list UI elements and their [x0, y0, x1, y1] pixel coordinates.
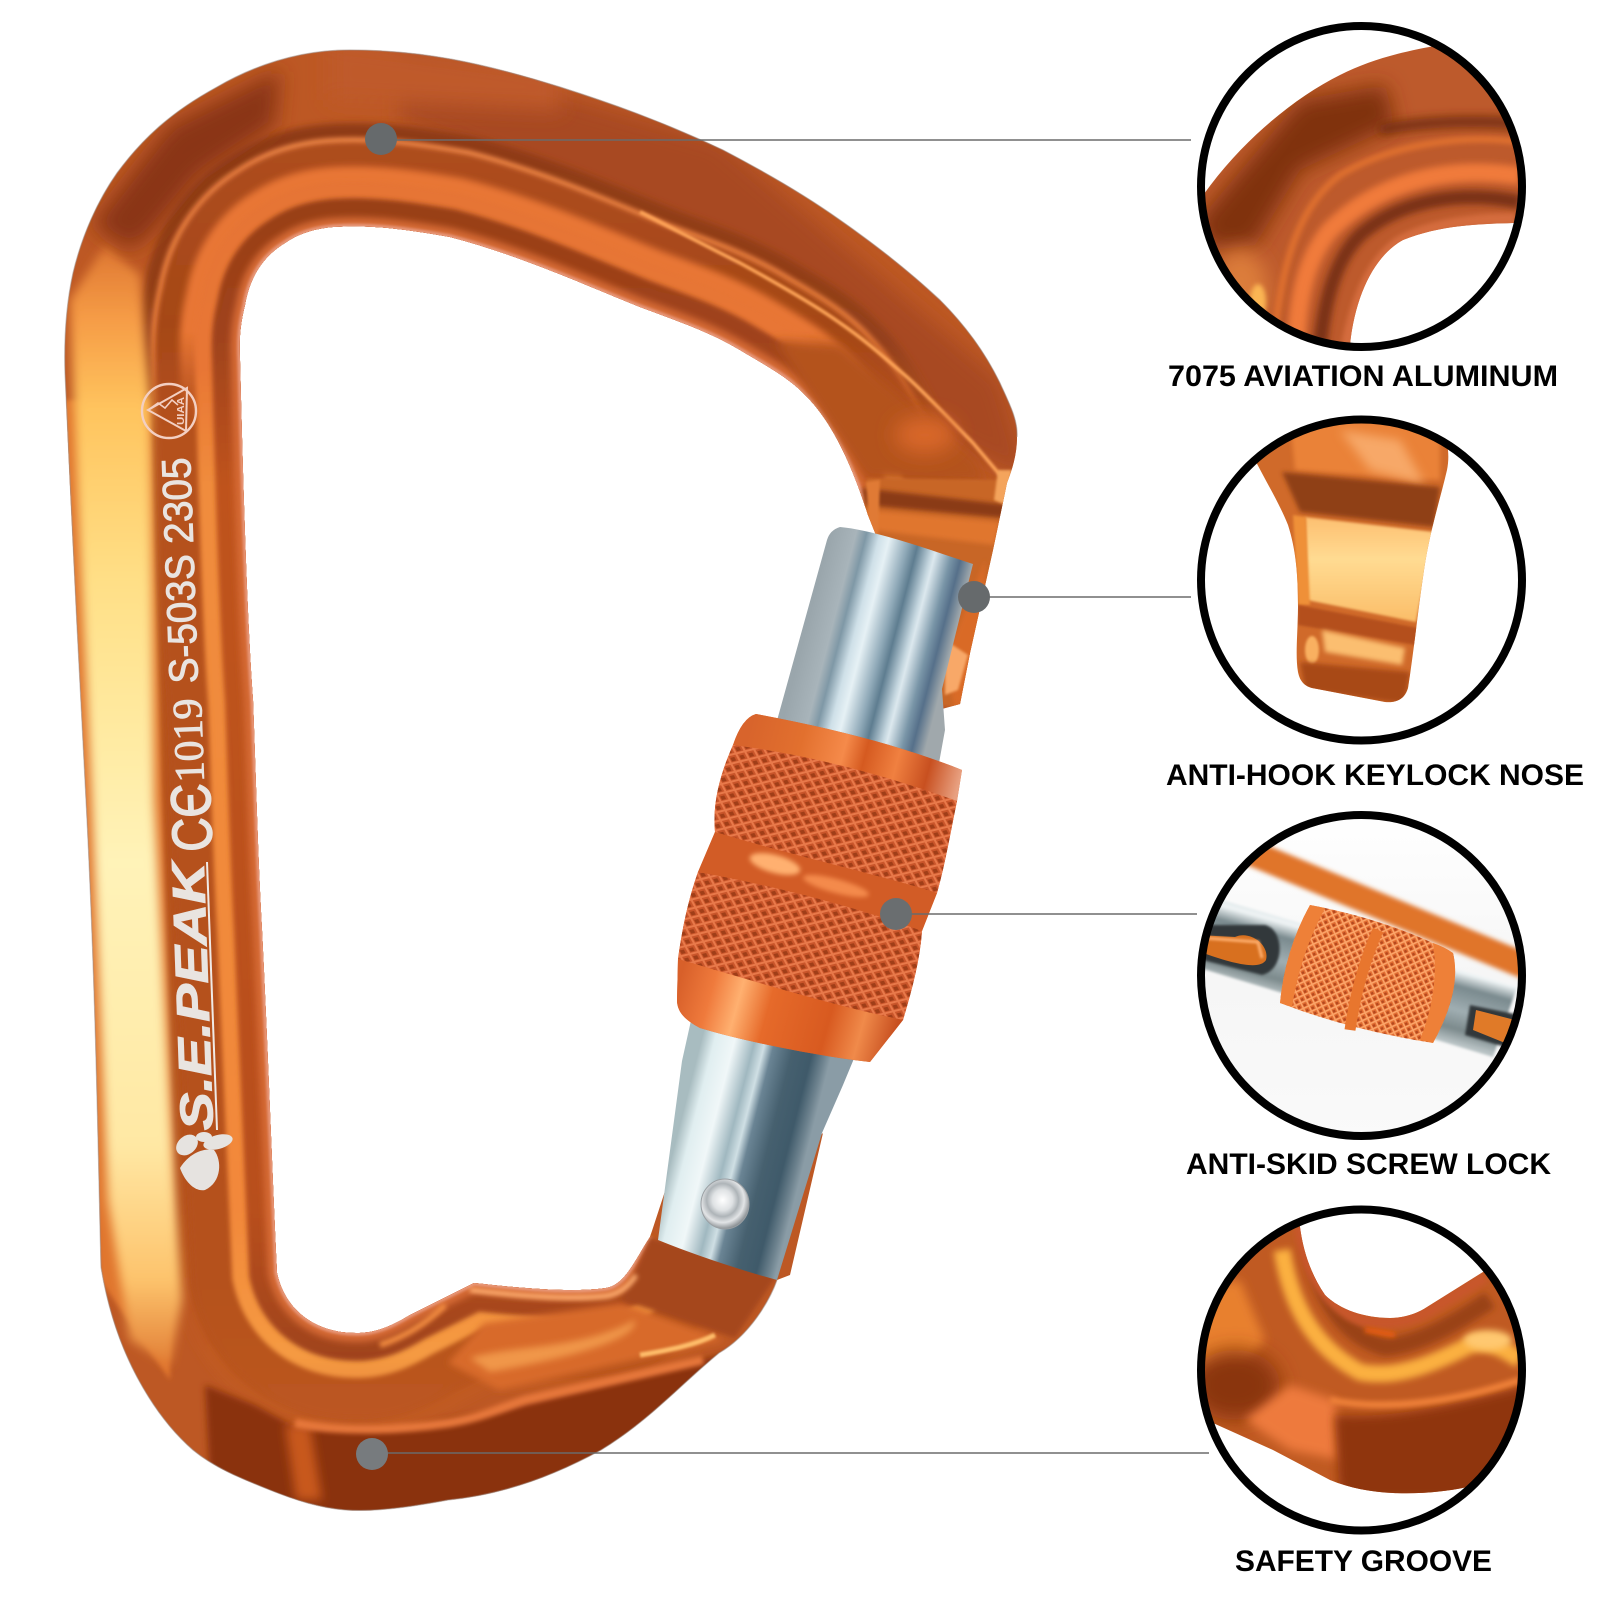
label: aviation aluminum: 7075 AVIATION ALUMINUM — [1168, 360, 1558, 393]
detail circle: aviation aluminum — [1190, 26, 1540, 360]
callout line — [381, 139, 1191, 141]
top-left dark reflection — [92, 70, 280, 250]
callout line — [895, 913, 1197, 915]
model number text: S-503S 2305 — [153, 457, 207, 684]
screw gate — [658, 527, 973, 1280]
label: keylock nose: ANTI-HOOK KEYLOCK NOSE — [1166, 759, 1584, 792]
bottom bend lower dark band — [202, 1352, 720, 1510]
top-right highlight line — [640, 212, 1000, 475]
icon: UIAA badge: UIAA — [176, 397, 187, 425]
gate sleeve lower — [658, 980, 870, 1280]
callout: keylock nose — [958, 581, 1191, 613]
gate sleeve upper — [755, 527, 973, 840]
callout dot — [365, 123, 397, 155]
callout dot — [958, 581, 990, 613]
lock collar — [677, 714, 962, 1062]
left bright reflection — [70, 245, 182, 1365]
callout line — [974, 596, 1191, 598]
icon: paw logo — [172, 1130, 234, 1190]
detail circle: safety groove — [1190, 1200, 1540, 1530]
label: screw lock: ANTI-SKID SCREW LOCK — [1186, 1148, 1551, 1181]
standard number text: 1019 — [165, 698, 214, 783]
circle ring — [1201, 26, 1522, 347]
circle ring — [1201, 815, 1522, 1136]
carabiner body — [40, 30, 1040, 1530]
CE mark: CЄ — [159, 783, 224, 853]
callout dot — [356, 1438, 388, 1470]
detail circle: screw lock — [1190, 810, 1530, 1150]
nose plate — [775, 340, 985, 482]
circle ring — [1201, 420, 1522, 740]
callout line — [372, 1452, 1209, 1454]
brand name: S.E.PEAK — [162, 858, 223, 1131]
label: safety groove: SAFETY GROOVE — [1235, 1545, 1492, 1578]
callout: screw lock — [880, 898, 1197, 930]
icon: UIAA badge — [142, 384, 196, 438]
callout: aviation aluminum — [365, 123, 1191, 155]
locking pin — [701, 1179, 749, 1229]
callout dot — [880, 898, 912, 930]
callout: safety groove — [356, 1438, 1209, 1470]
brand underline — [207, 862, 217, 1130]
engraved marks on the spine — [142, 384, 234, 1190]
circle ring — [1201, 1210, 1522, 1530]
detail circle: keylock nose — [1201, 400, 1522, 740]
